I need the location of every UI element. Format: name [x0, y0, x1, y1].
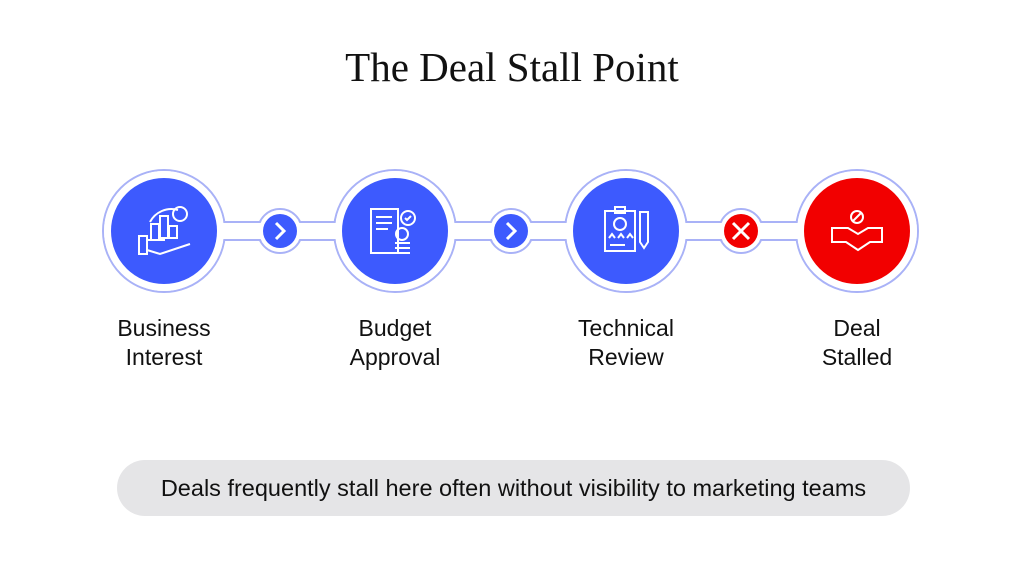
step 2 icon: budget approval	[342, 178, 448, 284]
label 2: Budget	[359, 315, 431, 341]
title: The Deal Stall Point	[345, 44, 679, 90]
arrow 1	[263, 214, 297, 248]
label 3: Technical	[578, 315, 674, 341]
label 4: Deal	[833, 315, 881, 341]
label 4	[822, 315, 892, 370]
step 1 icon: business interest	[111, 178, 217, 284]
callout: Deals frequently stall here often without visibility to marketing teams	[161, 475, 866, 501]
callout	[117, 460, 910, 516]
label 4: Stalled	[822, 344, 892, 370]
label 1: Business	[117, 315, 211, 341]
label 3: Review	[588, 344, 664, 370]
label 1: Interest	[126, 344, 202, 370]
label 3	[578, 315, 674, 370]
stop mark	[724, 214, 758, 248]
arrow 2	[494, 214, 528, 248]
step 3 icon: technical review	[573, 178, 679, 284]
label 2: Approval	[350, 344, 440, 370]
label 1	[117, 315, 211, 370]
step 4 icon: deal stalled	[804, 178, 910, 284]
label 2	[350, 315, 440, 370]
